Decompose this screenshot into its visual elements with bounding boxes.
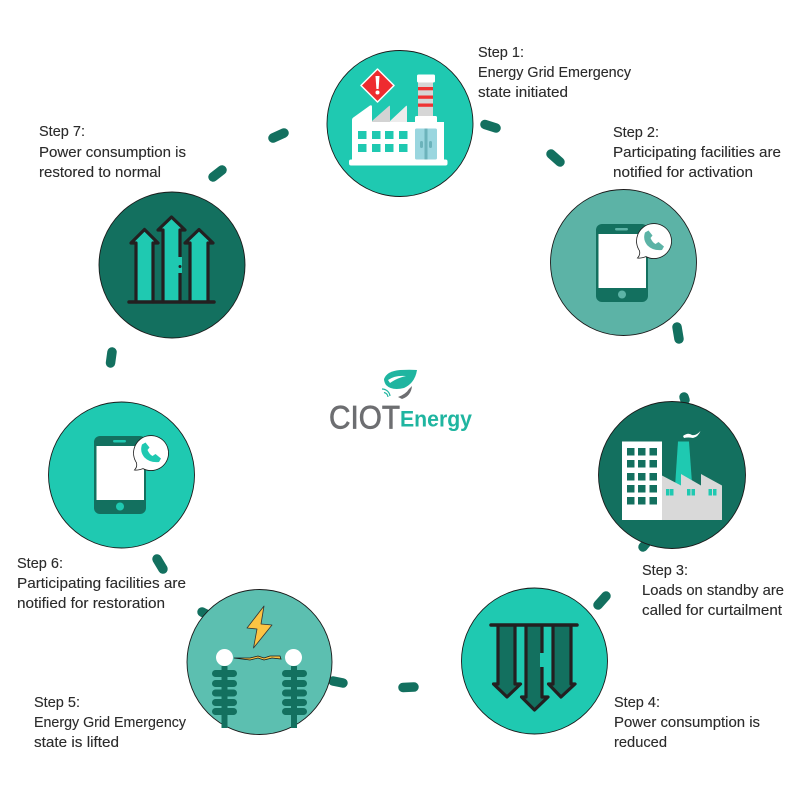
step 1 text bbox=[478, 45, 632, 101]
step 6: phone circle bbox=[48, 402, 194, 548]
step 4: down arrows circle bbox=[462, 588, 608, 734]
step 2: phone circle bbox=[550, 190, 696, 336]
step 5 text: state is lifted bbox=[34, 735, 119, 751]
icon: factory with alert bbox=[349, 69, 448, 166]
step 7 text: Step 7: bbox=[39, 124, 85, 140]
step 7 text: Power consumption is bbox=[39, 145, 186, 161]
icon: phone with call bubble bbox=[94, 436, 169, 514]
step 5 text: Step 5: bbox=[34, 695, 80, 711]
step 3 text bbox=[642, 563, 784, 619]
step 3 text: called for curtailment bbox=[642, 603, 782, 619]
step 5 text: Energy Grid Emergency bbox=[34, 715, 187, 731]
icon: office and factory bbox=[622, 431, 722, 520]
step 1 text: Energy Grid Emergency bbox=[478, 65, 632, 81]
step 1 text: Step 1: bbox=[478, 45, 524, 61]
logo wordmark: CIOT bbox=[329, 400, 400, 436]
icon: leaf bbox=[382, 370, 417, 399]
step 4 text: reduced bbox=[614, 735, 667, 751]
step 6 text bbox=[17, 556, 186, 612]
icon: arrows pointing up bbox=[129, 217, 214, 302]
step 1 text: state initiated bbox=[478, 85, 568, 101]
icon: arrows pointing down bbox=[491, 625, 577, 710]
step 2 text: Step 2: bbox=[613, 125, 659, 141]
step 3: city factory circle bbox=[598, 402, 746, 548]
icon: phone with call bubble bbox=[596, 224, 672, 302]
step 1: factory alert circle bbox=[327, 50, 473, 196]
step 4 text bbox=[614, 695, 760, 751]
step 6 text: Participating facilities are bbox=[17, 576, 186, 592]
step 7 text: restored to normal bbox=[39, 165, 161, 181]
step 2 text bbox=[613, 125, 781, 181]
step 3 text: Loads on standby are bbox=[642, 583, 784, 599]
step 5: transmission circle bbox=[187, 590, 332, 734]
step 2 text: Participating facilities are bbox=[613, 145, 781, 161]
logo: Energy bbox=[400, 406, 473, 432]
step 3 text: Step 3: bbox=[642, 563, 688, 579]
step 5 text bbox=[34, 695, 187, 751]
step 6 text: notified for restoration bbox=[17, 596, 165, 612]
icon: alert diamond bbox=[361, 69, 394, 102]
logo bbox=[329, 370, 473, 436]
step 7 text bbox=[39, 124, 186, 181]
step 2 text: notified for activation bbox=[613, 165, 753, 181]
step 4 text: Step 4: bbox=[614, 695, 660, 711]
step 4 text: Power consumption is bbox=[614, 715, 760, 731]
icon: insulators and spark bbox=[212, 606, 307, 728]
step 7: up arrows circle bbox=[99, 192, 245, 338]
connector dashes bbox=[110, 124, 685, 688]
step 6 text: Step 6: bbox=[17, 556, 63, 572]
